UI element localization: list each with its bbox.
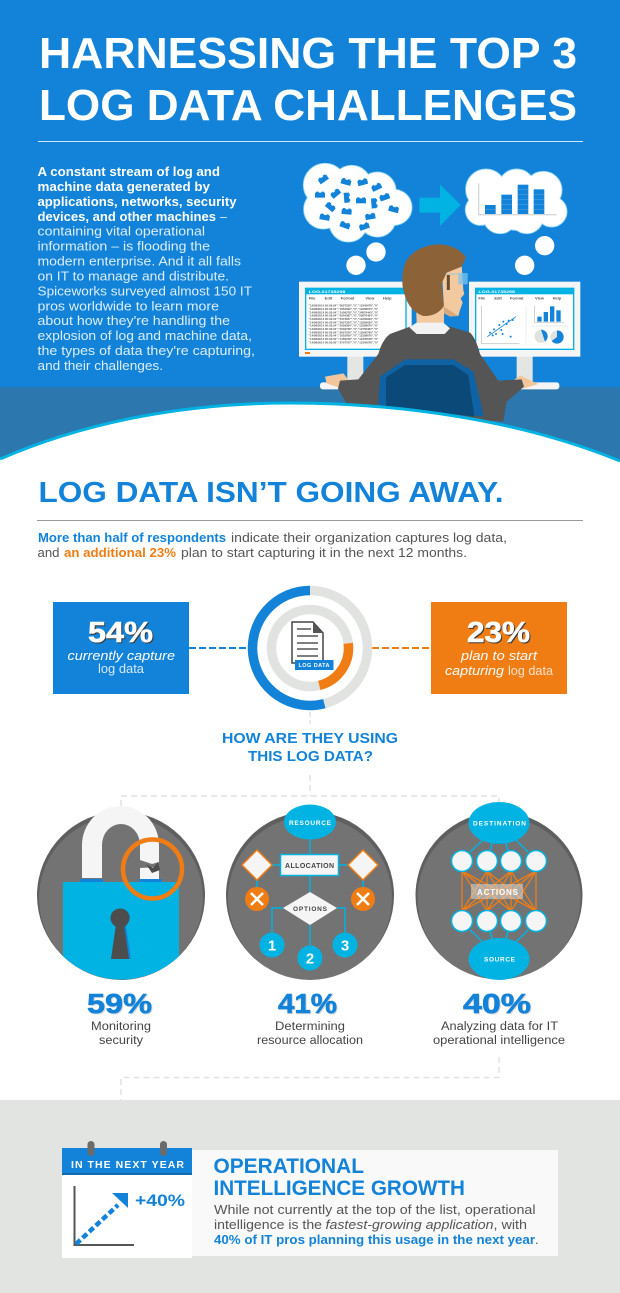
left monitor with log text: Help bbox=[383, 296, 392, 301]
section intro text: plan to start capturing it in the next 12 months. bbox=[181, 546, 467, 560]
calendar icon: in the next year: IN THE NEXT YEAR bbox=[71, 1159, 184, 1171]
intro paragraph: the types of data they're capturing, bbox=[38, 344, 255, 358]
stat: 41% resource allocation bbox=[257, 988, 363, 1047]
right monitor with charts: View bbox=[535, 296, 545, 301]
left monitor with log text: "14/08/2014 00:03:04","1459378","0","34879443","0" bbox=[309, 310, 379, 314]
intro paragraph bbox=[38, 165, 255, 373]
curved teal edge bbox=[0, 403, 620, 461]
stat: 41% resource allocation: Determining bbox=[275, 1021, 345, 1033]
stat: 59% monitoring security: security bbox=[99, 1035, 143, 1047]
thought cloud: organized bar chart bbox=[466, 169, 567, 233]
intro paragraph: A constant stream of log and bbox=[38, 165, 220, 179]
intro paragraph: devices, and other machines bbox=[38, 210, 216, 224]
stat: 40% operational intelligence bbox=[433, 988, 565, 1047]
person: glasses bbox=[446, 272, 459, 276]
right monitor with charts bbox=[469, 282, 580, 357]
use case: resource allocation flowchart icon: 2 bbox=[306, 950, 314, 968]
intro paragraph: – bbox=[220, 210, 227, 224]
intro paragraph: applications, networks, security bbox=[38, 195, 237, 209]
intro paragraph: explosion of log and machine data, bbox=[38, 329, 252, 343]
use case: resource allocation flowchart icon: 3 bbox=[341, 938, 349, 954]
stat: 59% monitoring security: Monitoring bbox=[91, 1021, 151, 1033]
stat: 40% operational intelligence: operational intelligence bbox=[433, 1035, 565, 1047]
stat: 40% operational intelligence: 40% bbox=[463, 988, 531, 1019]
left monitor with log text: "14/08/2014 00:03:04","0359364","0","12358670","0" bbox=[309, 324, 379, 328]
donut chart: capture rates bbox=[252, 590, 368, 706]
right monitor with charts: Format bbox=[510, 296, 524, 301]
use case: monitoring security icon bbox=[37, 806, 205, 980]
chair back bbox=[378, 359, 484, 417]
thought bubbles bbox=[346, 236, 554, 275]
question heading: THIS LOG DATA? bbox=[248, 749, 373, 765]
intro paragraph: about how they're handling the bbox=[38, 314, 230, 328]
stat box: 23%: log data bbox=[508, 664, 553, 678]
stat: 40% operational intelligence: Analyzing data for IT bbox=[441, 1021, 558, 1033]
right monitor with charts: Help bbox=[553, 296, 562, 301]
right monitor stand bbox=[493, 356, 559, 389]
use case: operational intelligence network icon bbox=[416, 802, 582, 980]
left monitor with log text: "14/08/2014 00:03:04","0339768","0","12750387","0" bbox=[309, 327, 379, 331]
stat box: 54%: log data bbox=[98, 662, 144, 676]
title bbox=[39, 29, 577, 130]
left monitor with log text: "14/08/2014 00:03:04","0657320","0","12345678","0" bbox=[309, 304, 379, 308]
calendar icon: in the next year bbox=[62, 1141, 192, 1258]
growth body text bbox=[214, 1203, 538, 1247]
intro paragraph: pros worldwide to learn more bbox=[38, 299, 219, 313]
left monitor with log text: "14/08/2014 00:03:04","1652009","0","12358670","0" bbox=[309, 307, 379, 311]
icon: log data document bbox=[292, 622, 334, 670]
growth body text: . bbox=[535, 1233, 538, 1247]
growth body text: While not currently at the top of the list, operational bbox=[214, 1203, 536, 1217]
section intro text: and bbox=[38, 546, 60, 560]
question heading bbox=[222, 731, 398, 765]
left monitor with log text bbox=[299, 282, 412, 357]
left monitor with log text: "14/08/2014 00:03:04","1459378","0","12345678","0" bbox=[309, 337, 379, 341]
growth heading bbox=[214, 1155, 465, 1200]
use case: operational intelligence network icon: DESTINATION bbox=[473, 820, 526, 828]
stat box: 23% bbox=[431, 602, 567, 694]
stat box: 23%: capturing bbox=[445, 664, 504, 678]
use case: resource allocation flowchart icon: 1 bbox=[268, 938, 276, 954]
connector: blue dashed bbox=[189, 647, 248, 649]
bottom band bbox=[0, 1100, 620, 1293]
connector: question to use cases bbox=[121, 775, 499, 806]
use case: resource allocation flowchart icon: OPTIONS bbox=[293, 906, 328, 913]
section intro text: More than half of respondents bbox=[38, 531, 226, 545]
stat box: 54%: 54% bbox=[88, 617, 153, 649]
calendar icon: in the next year: +40% bbox=[135, 1191, 185, 1210]
use case: resource allocation flowchart icon bbox=[226, 804, 394, 980]
person: neck bbox=[416, 303, 444, 324]
left monitor with log text: File bbox=[309, 296, 316, 301]
person: hands bbox=[325, 373, 350, 387]
left monitor with log text: "14/08/2014 00:03:04","1652009","0","12358670","0" bbox=[309, 334, 379, 338]
right monitor with charts: Edit bbox=[494, 296, 503, 301]
panel: growth text background bbox=[192, 1150, 558, 1256]
growth body text: fastest-growing application bbox=[326, 1218, 494, 1232]
left monitor with log text: "14/08/2014 00:03:05","0707707","0","12345678","0" bbox=[309, 340, 379, 344]
connector: donut to question bbox=[309, 712, 311, 724]
stat box: 23%: 23% bbox=[467, 617, 530, 649]
growth body text: intelligence is the bbox=[214, 1218, 322, 1232]
left monitor with log text: Edit bbox=[325, 296, 333, 301]
section intro text bbox=[38, 531, 507, 560]
stat box: 54%: currently capture bbox=[68, 649, 175, 663]
person: jacket and arms bbox=[338, 327, 524, 422]
use case: resource allocation flowchart icon: RESOURCE bbox=[289, 820, 332, 827]
section intro text: indicate their organization captures log data, bbox=[231, 531, 507, 545]
growth body text: 40% of IT pros planning this usage in the next year bbox=[214, 1233, 535, 1247]
stat box: 23%: plan to start bbox=[460, 649, 538, 663]
section intro text: an additional 23% bbox=[64, 546, 176, 560]
connector: orange dashed bbox=[372, 647, 431, 649]
use case: operational intelligence network icon: ACTIONS bbox=[477, 888, 519, 897]
person: face bbox=[442, 265, 464, 316]
floor band bbox=[0, 387, 620, 467]
growth heading: INTELLIGENCE GROWTH bbox=[214, 1177, 465, 1200]
section heading: LOG DATA ISN’T GOING AWAY. bbox=[38, 477, 503, 509]
stat: 59% monitoring security: 59% bbox=[87, 988, 152, 1019]
right monitor with charts: File bbox=[478, 296, 486, 301]
right monitor with charts: LOG.01735298 bbox=[478, 290, 515, 294]
intro paragraph: containing vital operational bbox=[38, 225, 205, 239]
intro paragraph: modern enterprise. And it all falls bbox=[38, 254, 241, 268]
white curved section bbox=[0, 403, 620, 1100]
intro paragraph: on IT to manage and distribute. bbox=[38, 270, 229, 284]
growth body text: , with bbox=[494, 1218, 527, 1232]
title: LOG DATA CHALLENGES bbox=[39, 81, 577, 130]
intro paragraph: and their challenges. bbox=[38, 359, 163, 373]
intro paragraph: Spiceworks surveyed almost 150 IT bbox=[38, 284, 252, 298]
left monitor stand bbox=[320, 356, 365, 389]
stat box: 54% bbox=[53, 602, 189, 694]
left monitor with log text: Format bbox=[341, 296, 355, 301]
use case: resource allocation flowchart icon: ALLOCATION bbox=[285, 863, 334, 870]
left monitor with log text: View bbox=[365, 296, 375, 301]
stat: 41% resource allocation: 41% bbox=[278, 988, 337, 1019]
person: hair bbox=[402, 244, 466, 316]
arrow: chaos to order bbox=[419, 184, 461, 226]
left monitor with log text: LOG.01735298 bbox=[309, 290, 345, 294]
icon: log data document: LOG DATA bbox=[298, 663, 330, 669]
left monitor with log text: "14/08/2014 00:03:04","0657320","0","13500790","0" bbox=[309, 330, 379, 334]
left monitor with log text: "14/08/2014 00:03:04","0344387","0","50870404","0" bbox=[309, 314, 379, 318]
stat: 41% resource allocation: resource allocation bbox=[257, 1035, 363, 1047]
header background bbox=[0, 0, 620, 388]
person: collar bbox=[409, 323, 450, 334]
connector: use cases to growth section bbox=[121, 1057, 499, 1100]
use case: operational intelligence network icon: SOURCE bbox=[484, 956, 516, 964]
left monitor with log text: "14/08/2014 00:03:04","0473657","0","12359030","0" bbox=[309, 317, 379, 321]
intro paragraph: machine data generated by bbox=[38, 180, 210, 194]
left monitor with log text: "14/08/2014 00:03:04","0657320","0","13359030","0" bbox=[309, 320, 379, 324]
person bbox=[325, 244, 538, 422]
intro paragraph: information – is flooding the bbox=[38, 240, 210, 254]
thought cloud: scattered data blocks bbox=[304, 164, 412, 242]
question heading: HOW ARE THEY USING bbox=[222, 731, 398, 747]
growth heading: OPERATIONAL bbox=[214, 1155, 364, 1178]
illustration: IT pro at two monitors bbox=[299, 164, 580, 422]
stat: 59% monitoring security bbox=[87, 988, 152, 1047]
title: HARNESSING THE TOP 3 bbox=[39, 29, 577, 78]
